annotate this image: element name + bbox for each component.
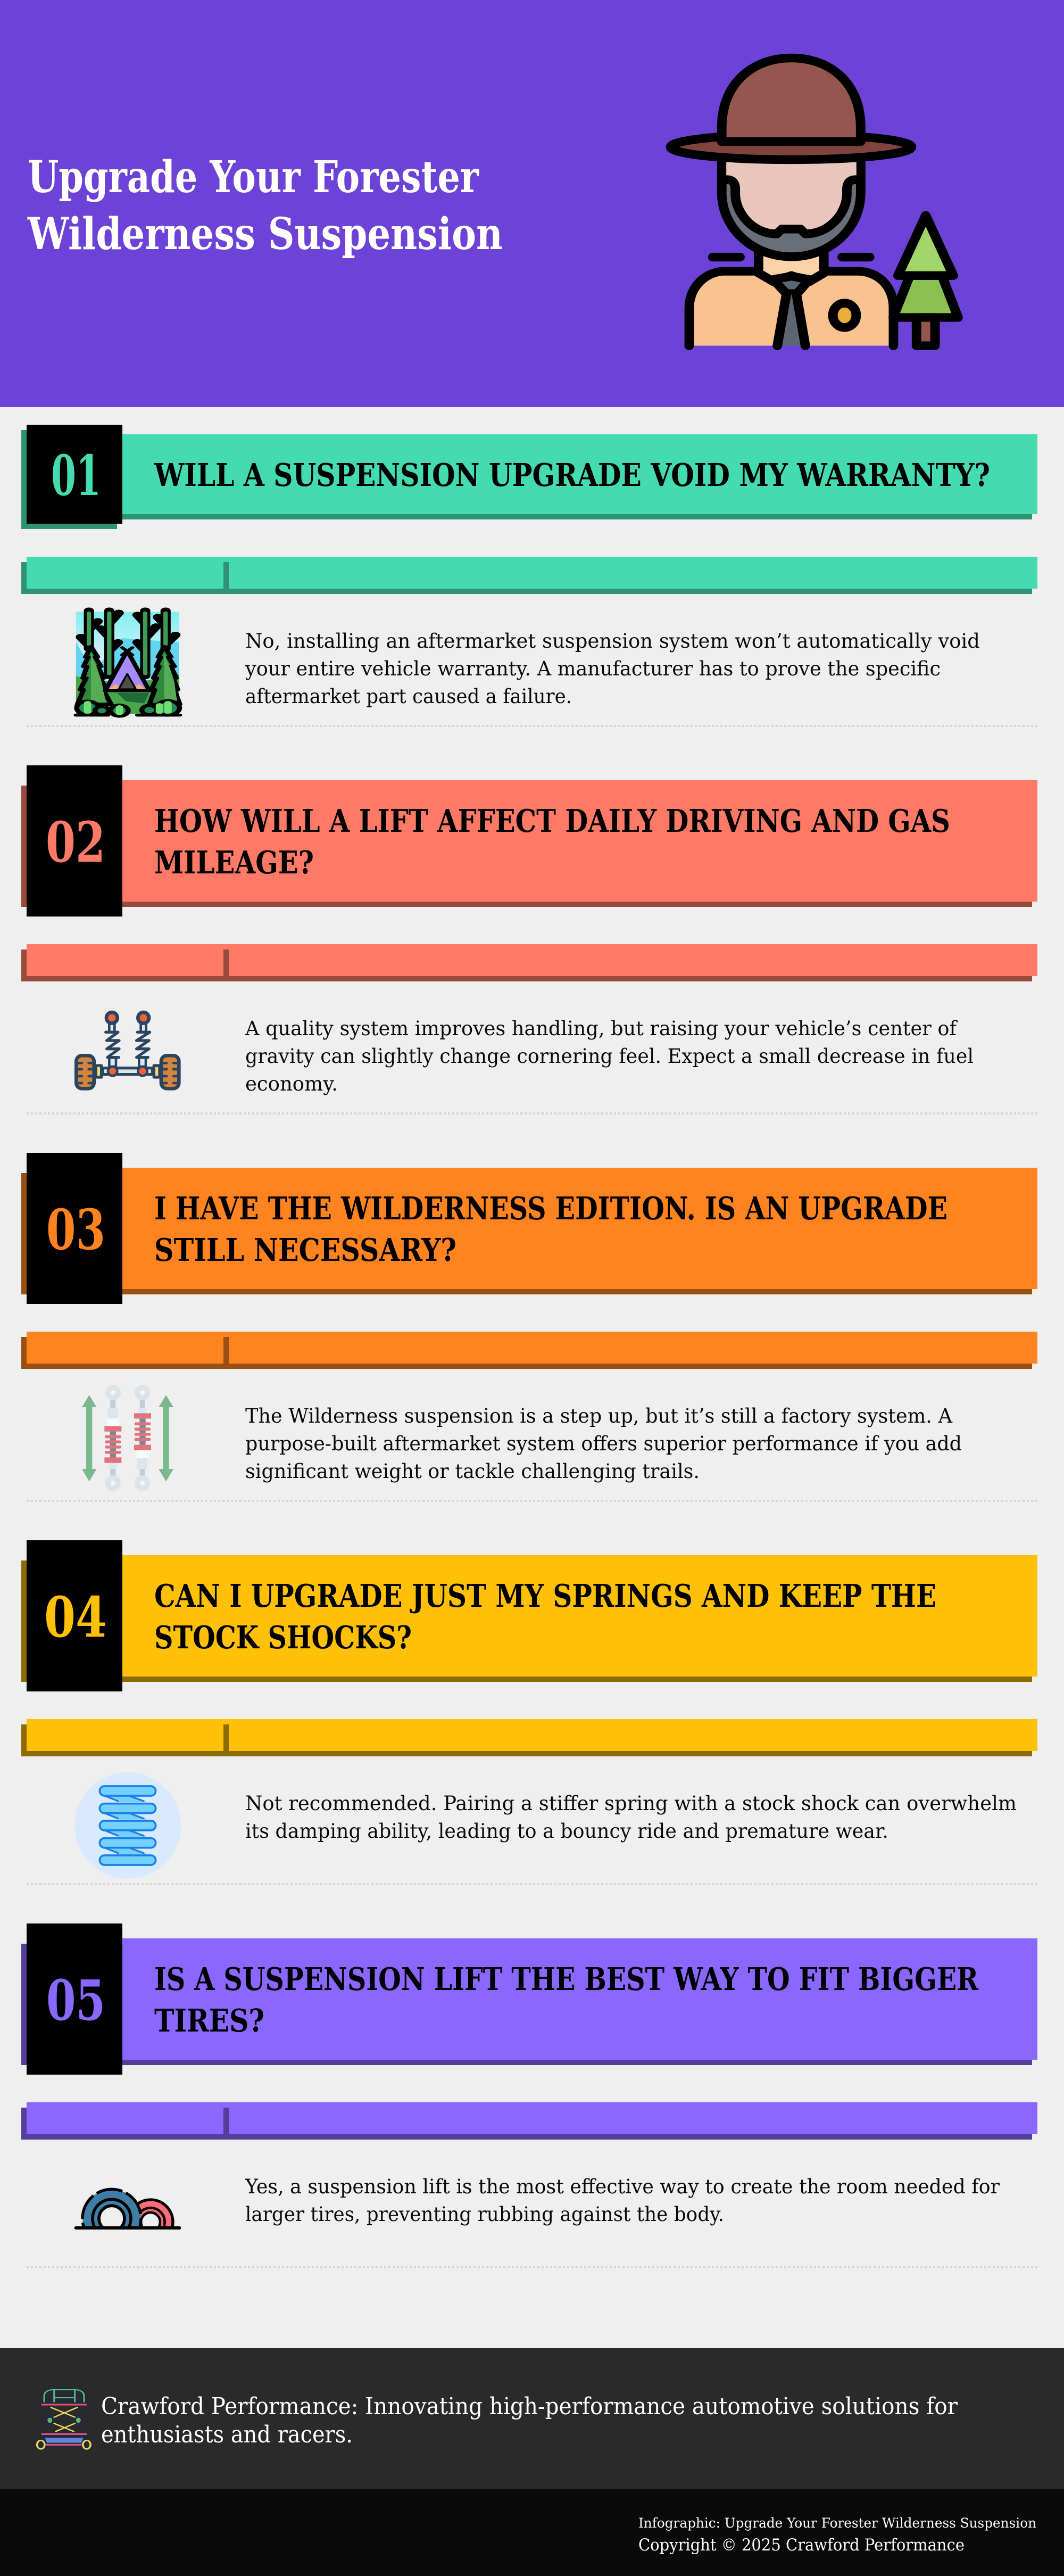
icon: two tires [71,2189,185,2257]
banner: question 1: 01 [51,443,101,508]
icon: park ranger with tree [671,58,958,346]
answer text 1: your entire vehicle warranty. A manufacturer has to prove the specific [245,657,941,680]
section 5 [21,1923,1037,2267]
copyright text: Infographic: Upgrade Your Forester Wilderness Suspension [638,2515,1036,2531]
banner: question 3: STILL NECESSARY? [154,1232,456,1268]
answer text 5 [245,2175,1000,2226]
answer text 4: its damping ability, leading to a bouncy ride and premature wear. [245,1820,888,1843]
banner: question 4: 04 [44,1584,107,1650]
answer text 1: No, installing an aftermarket suspension system won’t automatically void [245,630,980,653]
answer text 3 [245,1405,962,1483]
copyright bar [0,2489,1064,2576]
icon: camp tent in forest [76,610,180,716]
icon: scissor lift [37,2390,90,2449]
title: Wilderness Suspension [27,209,503,260]
banner: question 4 [21,1540,1037,1691]
colour bar 2 [21,944,1037,981]
banner: question 5 [21,1923,1037,2075]
company footer panel [0,2348,1064,2489]
answer text 2: gravity can slightly change cornering feel. Expect a small decrease in fuel [245,1045,974,1068]
banner: question 2: 02 [46,810,105,875]
answer text 3: purpose-built aftermarket system offers superior performance if you add [245,1432,962,1455]
copyright text [638,2515,1036,2555]
section 3 [21,1153,1037,1501]
banner: question 3 [21,1153,1037,1304]
answer text 1: aftermarket part caused a failure. [245,685,572,708]
title [27,152,503,260]
answer text 5: larger tires, preventing rubbing against the body. [245,2203,724,2226]
answer text 4 [245,1792,1017,1843]
banner: question 3: 03 [46,1197,105,1262]
banner: question 4: STOCK SHOCKS? [154,1619,412,1656]
banner: question 5: 05 [46,1968,105,2033]
answer text 4: Not recommended. Pairing a stiffer spring with a stock shock can overwhelm [245,1792,1017,1815]
colour bar 5 [21,2102,1037,2140]
banner: question 2: MILEAGE? [154,844,314,881]
section 1 [21,425,1037,726]
header panel [0,0,1064,407]
section 4 [21,1540,1037,1884]
answer text 3: The Wilderness suspension is a step up, but it’s still a factory system. A [245,1405,953,1427]
company statement: enthusiasts and racers. [101,2421,353,2448]
answer text 5: Yes, a suspension lift is the most effective way to create the room needed for [245,2175,1000,2198]
icon: axle and coil springs [76,1012,179,1088]
answer text 2 [245,1017,974,1095]
icon: two shocks with arrows [82,1385,173,1491]
colour bar 3 [21,1332,1037,1369]
section 2 [21,765,1037,1113]
answer text 2: A quality system improves handling, but raising your vehicle’s center of [245,1017,958,1040]
colour bar 1 [21,557,1037,594]
banner: question 4: CAN I UPGRADE JUST MY SPRINGS AND KEEP THE [154,1578,936,1614]
title: Upgrade Your Forester [28,152,479,203]
banner: question 5: TIRES? [154,2002,264,2039]
colour bar 4 [21,1719,1037,1756]
answer text 2: economy. [245,1072,338,1095]
company statement: Crawford Performance: Innovating high-performance automotive solutions for [101,2393,958,2420]
icon: coil spring [74,1772,181,1879]
banner: question 1 [21,425,1037,529]
company statement [101,2393,958,2448]
answer text 3: significant weight or tackle challenging trails. [245,1460,700,1483]
answer text 1 [245,630,980,708]
banner: question 2 [21,765,1037,917]
copyright text: Copyright © 2025 Crawford Performance [638,2536,965,2555]
